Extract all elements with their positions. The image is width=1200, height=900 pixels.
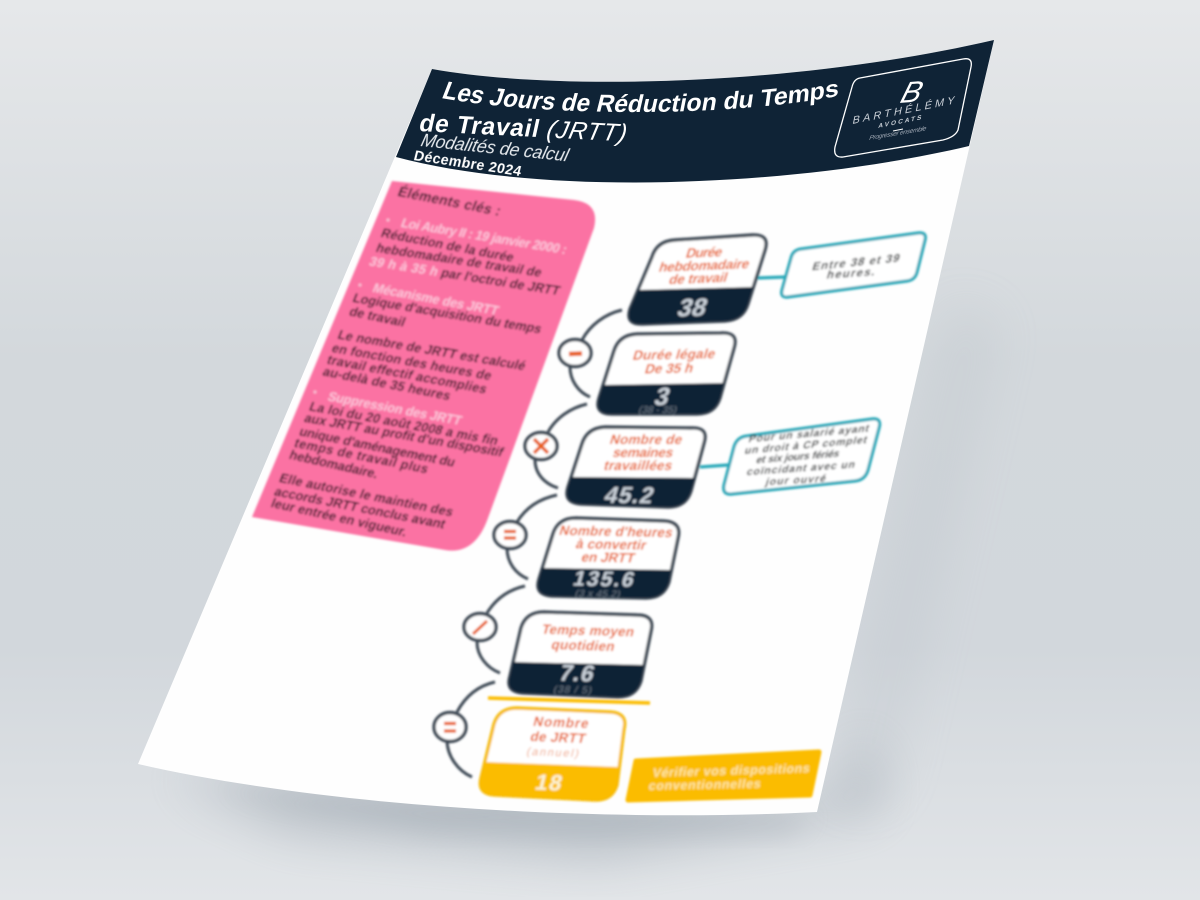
connector: divide [464,586,525,673]
connector: equals [494,495,557,579]
callout: entre 38 et 39 heures: heures. [825,266,877,282]
card: durée hebdomadaire: de travail [667,269,730,287]
paper shadow [170,300,1000,858]
title: de Travail (JRTT) [417,110,630,147]
card: semaines travaillées: travaillées [602,458,675,473]
bullet: mécanisme: travail effectif accomplies [325,352,490,396]
callout: salarié droit cp: et six jours fériés [755,448,841,466]
card: durée hebdomadaire: hebdomadaire [657,256,752,275]
callout: vérifier dispositions [628,752,819,800]
bullet: loi aubry: par l'octroi de JRTT [439,265,563,298]
connector: result equals [434,682,495,777]
bullet: suppression [269,389,506,539]
subtitle: Modalités de calcul [419,130,572,165]
panel: éléments clés [252,181,595,551]
logo [835,59,971,157]
card: temps moyen quotidien: Temps moyen [540,622,636,639]
title [417,82,838,147]
card: nombre de jrtt: Nombre [532,714,591,731]
callout: salarié droit cp: Pour un salarié ayant [747,423,871,445]
bullet: suppression: Suppression des JRTT [326,389,464,428]
logo: B [897,74,927,110]
callout: salarié droit cp [700,419,880,494]
card: heures à convertir: (3 x 45.2) [574,589,622,600]
card: durée hebdomadaire [629,235,766,324]
bullet: mécanisme: en fonction des heures de [330,340,494,383]
bullet: suppression: La loi du 20 août 2008 a mis fin [307,399,501,448]
bullet: loi aubry: Réduction de la durée [379,225,517,265]
paper sheet [138,40,994,815]
card: durée légale: Durée légale [631,346,718,363]
bullet: suppression: aux JRTT au profit d'un dispositif [302,410,506,460]
card: temps moyen quotidien [509,612,652,697]
card: durée hebdomadaire: Durée [684,244,725,261]
callout: salarié droit cp: un droit à CP complet [743,434,869,457]
card: heures à convertir: à convertir [574,537,649,553]
bullet: mécanisme: Mécanisme des JRTT [371,280,501,318]
title: Les Jours de Réduction du Temps [442,82,838,112]
card: temps moyen quotidien: (38 / 5) [552,685,593,697]
result separator [488,698,650,703]
bullet: mécanisme: de travail [347,304,408,330]
connector: minus [559,310,622,397]
card: nombre de jrtt [480,708,625,800]
bullet: loi aubry: hebdomadaire de travail de [374,240,545,280]
bullet: mécanisme: au-delà de 35 heures [321,364,453,403]
date: Décembre 2024 [412,148,523,180]
logo: AVOCATS [878,114,923,130]
calculation flow [434,233,925,800]
panel heading: Éléments clés : [396,183,504,219]
callout: salarié droit cp: coïncidant avec un [745,459,857,478]
card: durée légale: 3 [651,383,673,411]
card: semaines travaillées: semaines [611,445,676,460]
card: heures à convertir: Nombre d'heures [558,523,675,540]
card: nombre de jrtt: de JRTT [529,729,588,746]
bullet: suppression: hebdomadaire. [287,447,381,481]
bullet: suppression: unique d'aménagement du [297,424,458,470]
bullet: suppression: temps de travail plus [292,435,431,476]
bullet: suppression: leur entrée en vigueur. [269,495,410,539]
bullet: loi aubry: 39 h à 35 h [367,254,441,279]
card: nombre de jrtt: 18 [533,770,565,795]
card: durée légale: De 35 h [643,361,696,376]
bullet: mécanisme: Logique d'acquisition du temps [351,290,544,336]
callout: entre 38 et 39 heures: Entre 38 et 39 [811,252,902,273]
bullet: loi aubry: Loi Aubry II : 19 janvier 2000 : [399,215,570,257]
bullet: suppression: Elle autorise le maintien des [277,470,456,519]
card: semaines travaillées: Nombre de [608,432,685,447]
card: durée légale: (38 - 35) [637,405,678,416]
card: durée légale [598,333,735,416]
card: temps moyen quotidien: 7.6 [557,660,598,686]
card: heures à convertir: 135.6 [571,567,637,592]
card: heures à convertir: en JRTT [580,550,637,565]
callout: vérifier dispositions: Vérifier vos dispositions [651,761,811,780]
bullet: mécanisme [321,280,544,403]
bullet: mécanisme: Le nombre de JRTT est calculé [336,327,528,373]
header banner [396,40,994,182]
bullet: loi aubry [367,215,570,298]
card: temps moyen quotidien: quotidien [550,637,617,654]
connector: multiply [525,404,587,488]
card: semaines travaillées [567,427,705,508]
bullet: suppression: accords JRTT conclus avant [272,484,448,531]
logo: BARTHÉLÉMY [851,94,956,127]
card: nombre de jrtt: (annuel) [525,746,580,760]
card: durée hebdomadaire: 38 [674,294,711,322]
callout: entre 38 et 39 heures [758,233,925,297]
card: semaines travaillées: 45.2 [602,482,657,508]
callout: vérifier dispositions: conventionnelles [647,777,762,793]
logo: Progresser ensemble [869,125,927,142]
card: heures à convertir [538,518,679,600]
callout: salarié droit cp: jour ouvré [763,473,828,488]
